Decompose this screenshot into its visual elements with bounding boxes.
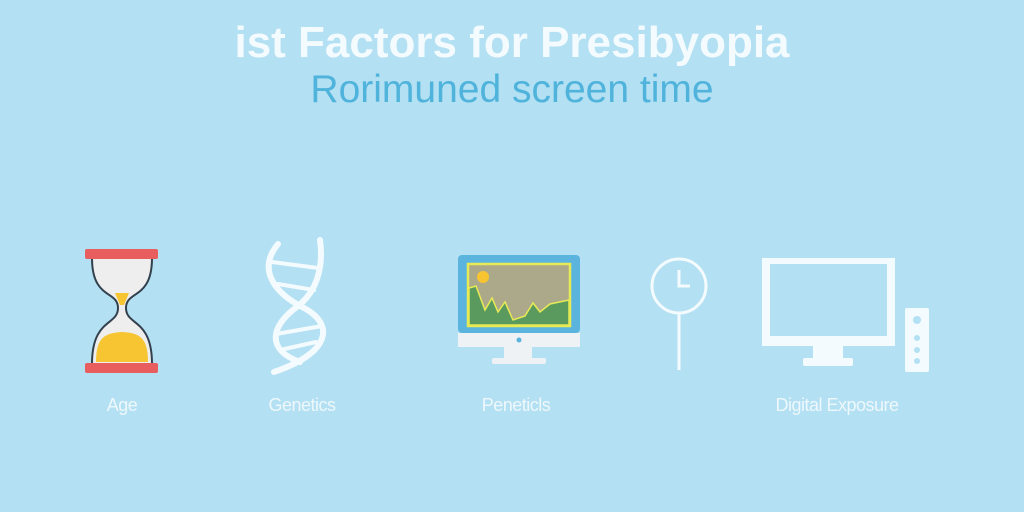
label: Peneticls: Peneticls: [482, 395, 550, 415]
icon: DNA: [269, 240, 323, 372]
icon: hourglass: [85, 249, 158, 373]
subtitle: Rorimuned screen time: [310, 68, 714, 111]
title: ist Factors for Presibyopia: [234, 18, 790, 67]
label: Genetics: Genetics: [268, 395, 336, 415]
label: Digital Exposure: Digital Exposure: [775, 395, 899, 415]
icon: desktop computer: [762, 258, 929, 372]
icon: monitor with chart: [458, 255, 580, 364]
label: Age: Age: [107, 395, 137, 415]
icon: clock on stick: [652, 259, 706, 370]
